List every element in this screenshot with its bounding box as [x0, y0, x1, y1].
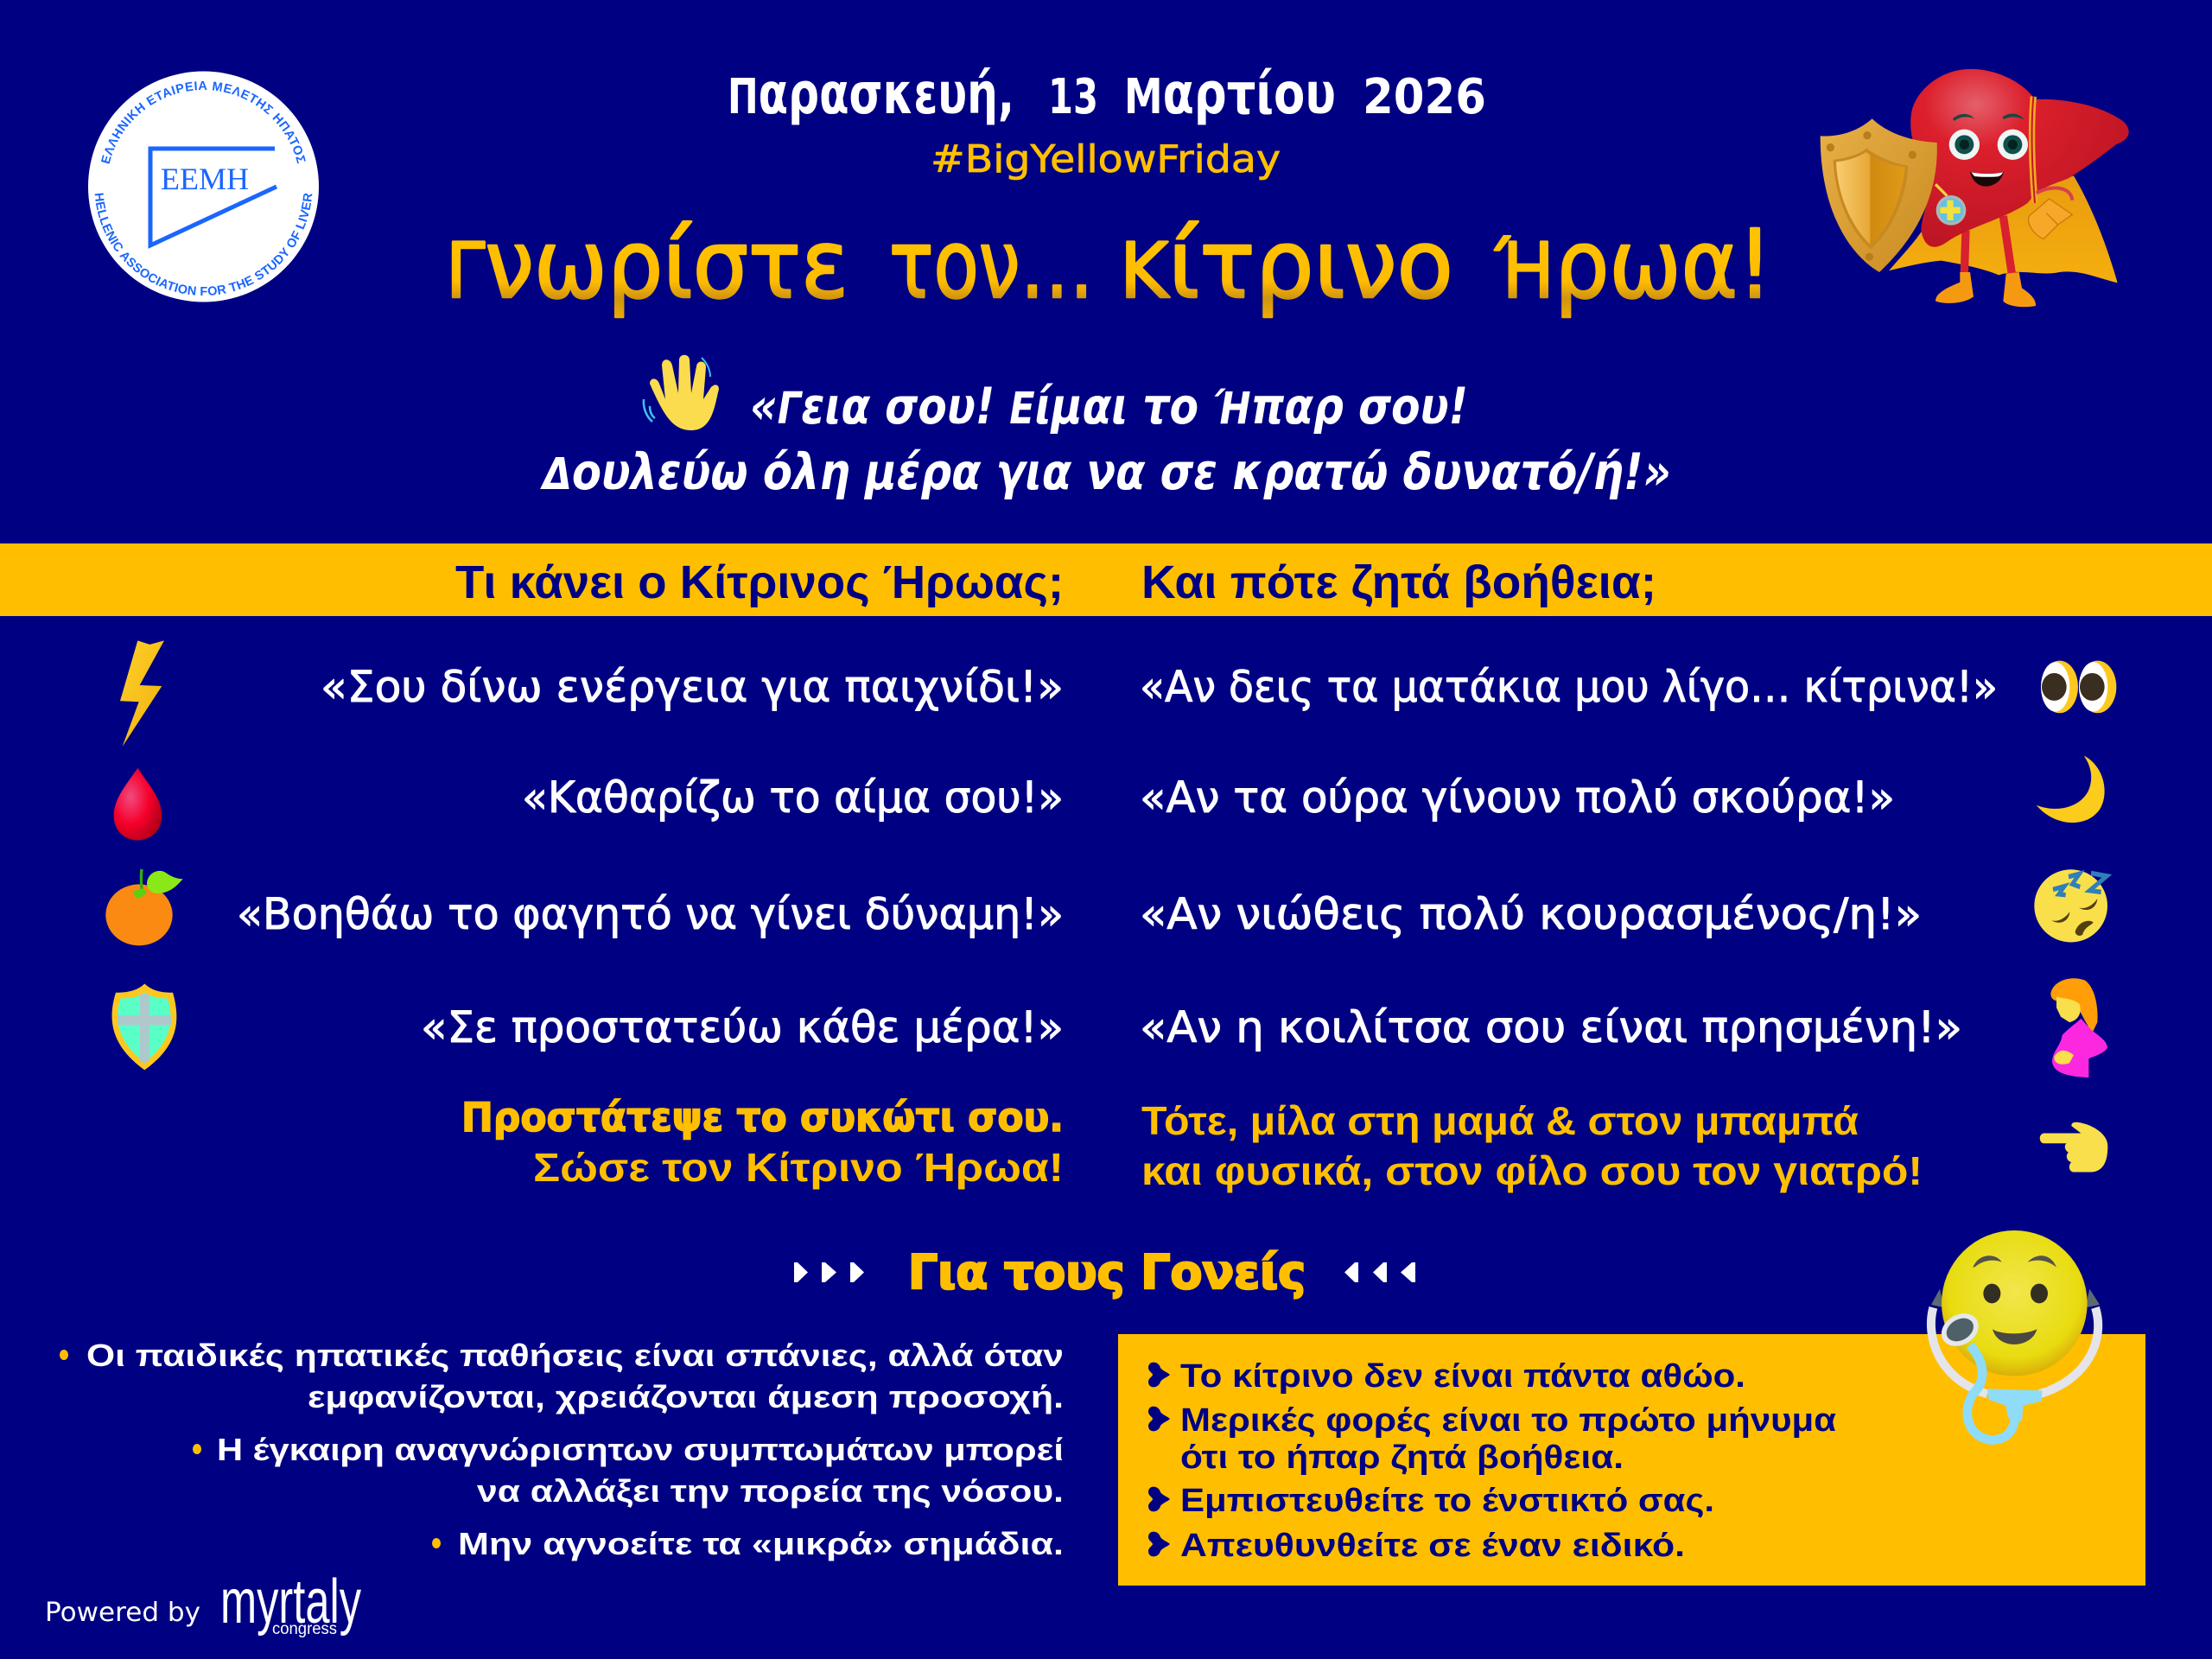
panel: yellow advice box: Το κίτρινο δεν είναι πάντα αθώο.	[1180, 1358, 1745, 1395]
powered by: Powered by	[45, 1598, 200, 1628]
callout left	[461, 1094, 1064, 1190]
right column: when it asks for help: «Αν νιώθεις πολύ κουρασμένος/η!»	[1140, 889, 1922, 939]
panel: yellow advice box: Απευθυνθείτε σε έναν ειδικό.	[1180, 1528, 1685, 1564]
logo: myrtaly congress: myrtaly	[220, 1567, 361, 1637]
right column: when it asks for help: «Αν τα ούρα γίνουν πολύ σκούρα!»	[1140, 772, 1895, 823]
icon: pregnant woman	[2050, 978, 2107, 1077]
left column: what the hero does: «Σου δίνω ενέργεια για παιχνίδι!»	[321, 662, 1064, 712]
icon: waving hand	[644, 355, 719, 430]
icon: lightning bolt	[120, 640, 164, 747]
date heading	[728, 60, 1486, 127]
date heading: 2026	[1363, 69, 1486, 125]
logo: EEMH hellenic association: HELLENIC ASSOCIATION FOR THE STUDY OF LIVER	[95, 194, 313, 296]
title: τον…	[889, 209, 1094, 320]
quote line 1: «Γεια σου! Είμαι το Ήπαρ σου!	[750, 377, 1468, 435]
icon: orange	[105, 869, 183, 945]
panel: yellow advice box: ότι το ήπαρ ζητά βοήθεια.	[1180, 1440, 1624, 1476]
parents advice list: Οι παιδικές ηπατικές παθήσεις είναι σπάνιες, αλλά όταν	[86, 1338, 1064, 1373]
right column: when it asks for help: «Αν δεις τα ματάκια μου λίγο… κίτρινα!»	[1140, 662, 1998, 712]
panel: yellow advice box	[1118, 1334, 2145, 1586]
title: Κίτρινο	[1120, 209, 1453, 320]
right column: when it asks for help: «Αν η κοιλίτσα σου είναι πρησμένη!»	[1140, 1002, 1962, 1052]
arrows left	[1344, 1262, 1415, 1282]
parents advice list: Μην αγνοείτε τα «μικρά» σημάδια.	[458, 1526, 1064, 1561]
panel: yellow advice box: Μερικές φορές είναι το πρώτο μήνυμα	[1180, 1402, 1836, 1439]
title: Ήρωα!	[1494, 209, 1772, 320]
left heading: Τι κάνει ο Κίτρινος Ήρωας;	[455, 556, 1064, 608]
left column: what the hero does: «Καθαρίζω το αίμα σου!»	[522, 772, 1064, 823]
icon: smiley with stethoscope	[1931, 1230, 2100, 1440]
heading: for the parents: Για τους Γονείς	[908, 1245, 1306, 1300]
callout right	[1141, 1098, 1923, 1193]
left column: what the hero does: «Βοηθάω το φαγητό να γίνει δύναμη!»	[237, 889, 1064, 939]
parents advice list: εμφανίζονται, χρειάζονται άμεση προσοχή.	[308, 1379, 1064, 1414]
yellow header band	[0, 543, 2212, 616]
icon: sleeping face	[2034, 869, 2107, 942]
icon: crescent moon	[2037, 756, 2105, 823]
quote line 2: Δουλεύω όλη μέρα για να σε κρατώ δυνατό/ή!»	[540, 442, 1671, 501]
parents advice list	[60, 1338, 1064, 1561]
logo: EEMH hellenic association: ΕΛΛΗΝΙΚΗ ΕΤΑΙΡΕΙΑ ΜΕΛΕΤΗΣ ΗΠΑΤΟΣ	[100, 81, 306, 164]
right heading: Και πότε ζητά βοήθεια;	[1141, 556, 1656, 608]
callout right: και φυσικά, στον φίλο σου τον γιατρό!	[1141, 1148, 1923, 1193]
logo: EEMH hellenic association: ΕΕΜΗ	[161, 162, 249, 196]
parents advice list: να αλλάξει την πορεία της νόσου.	[477, 1473, 1064, 1509]
left column: what the hero does: «Σε προστατεύω κάθε μέρα!»	[421, 1002, 1064, 1052]
panel: yellow advice box: Εμπιστευθείτε το ένστικτό σας.	[1180, 1483, 1714, 1519]
logo: myrtaly congress	[220, 1567, 361, 1638]
logo: myrtaly congress: congress	[272, 1620, 337, 1638]
arrows right	[794, 1262, 864, 1282]
right column: when it asks for help	[1140, 662, 1998, 1052]
icon: pointing hand	[2040, 1122, 2107, 1173]
title: Γνωρίστε	[446, 209, 849, 320]
hashtag: #BigYellowFriday	[931, 137, 1281, 181]
date heading: Μαρτίου	[1124, 60, 1336, 127]
icon: liver superhero mascot	[1821, 69, 2129, 307]
parents advice list: Η έγκαιρη αναγνώρισητων συμπτωμάτων μπορεί	[217, 1432, 1064, 1467]
icon: blood drop	[114, 768, 162, 840]
icon: eyes	[2041, 661, 2116, 713]
title	[446, 209, 1772, 320]
callout left: Προστάτεψε το συκώτι σου.	[461, 1094, 1064, 1141]
callout right: Τότε, μίλα στη μαμά & στον μπαμπά	[1141, 1098, 1859, 1143]
left column: what the hero does	[237, 662, 1064, 1052]
date heading: 13	[1048, 69, 1098, 125]
logo: EEMH hellenic association	[88, 71, 319, 302]
icon: shield	[112, 983, 176, 1070]
date heading: Παρασκευή,	[728, 60, 1014, 127]
callout left: Σώσε τον Κίτρινο Ήρωα!	[533, 1145, 1064, 1190]
